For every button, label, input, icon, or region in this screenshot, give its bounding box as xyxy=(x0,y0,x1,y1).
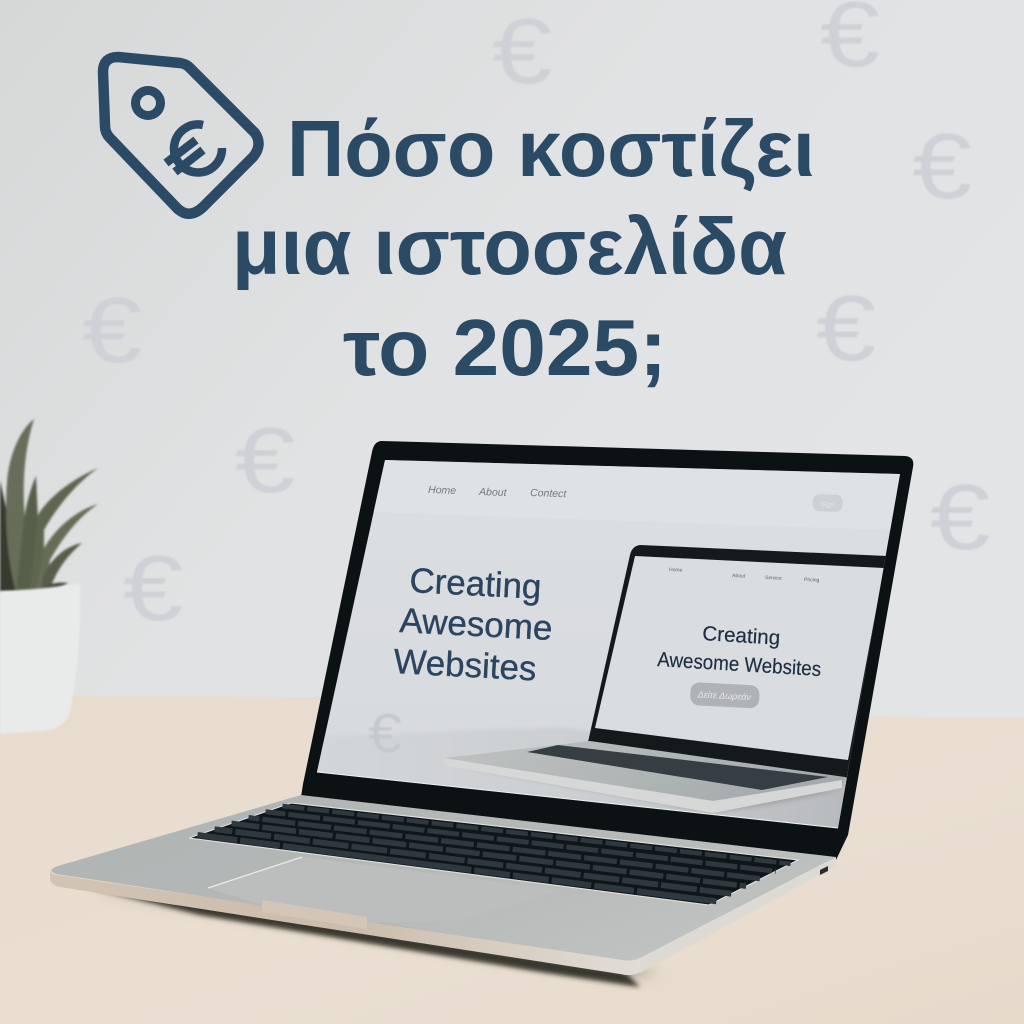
title xyxy=(232,104,815,392)
trackpad xyxy=(208,857,560,929)
nested nav: About xyxy=(732,573,746,580)
nested nav: Service xyxy=(765,575,782,582)
euro watermark pattern: € xyxy=(930,466,990,569)
keyboard xyxy=(189,803,798,905)
euro symbol xyxy=(166,124,222,172)
screen navigation: Contect xyxy=(530,487,568,500)
screen navigation xyxy=(428,486,567,498)
euro watermark pattern: € xyxy=(82,279,142,382)
screen headline xyxy=(394,568,551,681)
euro watermark pattern: € xyxy=(492,0,552,103)
trackpad notch xyxy=(262,900,367,929)
nested headline xyxy=(657,626,820,676)
laptop contact shadow xyxy=(75,884,640,987)
faint euro on screen: € xyxy=(368,703,402,764)
screen headline: Awesome xyxy=(399,601,553,648)
euro watermark pattern xyxy=(82,0,990,640)
wall background xyxy=(0,0,1024,740)
euro watermark pattern: € xyxy=(816,277,876,380)
nested headline: Awesome Websites xyxy=(657,648,822,681)
nested shadow xyxy=(508,776,832,814)
title: μια ιστοσελίδα xyxy=(232,202,787,291)
keyboard key rows xyxy=(198,806,791,901)
nested laptop xyxy=(444,545,887,813)
price tag icon xyxy=(103,57,259,214)
screen headline: Creating xyxy=(409,561,542,607)
front edge xyxy=(50,871,640,975)
screen light rim xyxy=(317,772,838,828)
tag hole xyxy=(136,90,160,116)
euro watermark pattern: € xyxy=(912,115,972,218)
screen desk surface xyxy=(317,728,850,828)
nested headline: Creating xyxy=(702,622,781,650)
euro watermark pattern: € xyxy=(123,537,183,640)
plant leaves xyxy=(0,419,98,592)
nested base xyxy=(444,741,845,806)
screen navigation: Home xyxy=(428,484,456,497)
wooden table xyxy=(0,695,1024,1024)
laptop base xyxy=(50,795,836,975)
laptop lid xyxy=(300,441,920,860)
laptop xyxy=(50,441,920,987)
nested lid xyxy=(588,545,887,778)
nested button: Δείτε Δωρεάν xyxy=(696,689,752,702)
screen navigation: About xyxy=(478,486,508,499)
nested button xyxy=(690,682,760,709)
title: το 2025; xyxy=(343,303,667,392)
nested nav xyxy=(669,567,820,584)
nested nav: Home xyxy=(669,567,683,574)
euro watermark pattern: € xyxy=(235,409,295,512)
title: Πόσο κοστίζει xyxy=(287,104,815,193)
screen nav button xyxy=(812,494,843,512)
base deck xyxy=(51,795,836,961)
usb port xyxy=(820,866,828,875)
screen headline: Websites xyxy=(393,642,537,688)
potted plant xyxy=(0,419,98,734)
nested keyboard xyxy=(527,745,828,790)
tag outline xyxy=(103,57,259,214)
screen header band xyxy=(372,460,900,530)
lid bezel xyxy=(301,441,913,860)
laptop soft shadow xyxy=(90,890,660,978)
screen contents xyxy=(317,460,900,828)
nested screen xyxy=(595,556,884,760)
right edge xyxy=(640,857,836,973)
nested nav: Pricing xyxy=(804,577,820,584)
pot xyxy=(0,583,80,734)
screen nav button: Sign xyxy=(820,501,835,509)
